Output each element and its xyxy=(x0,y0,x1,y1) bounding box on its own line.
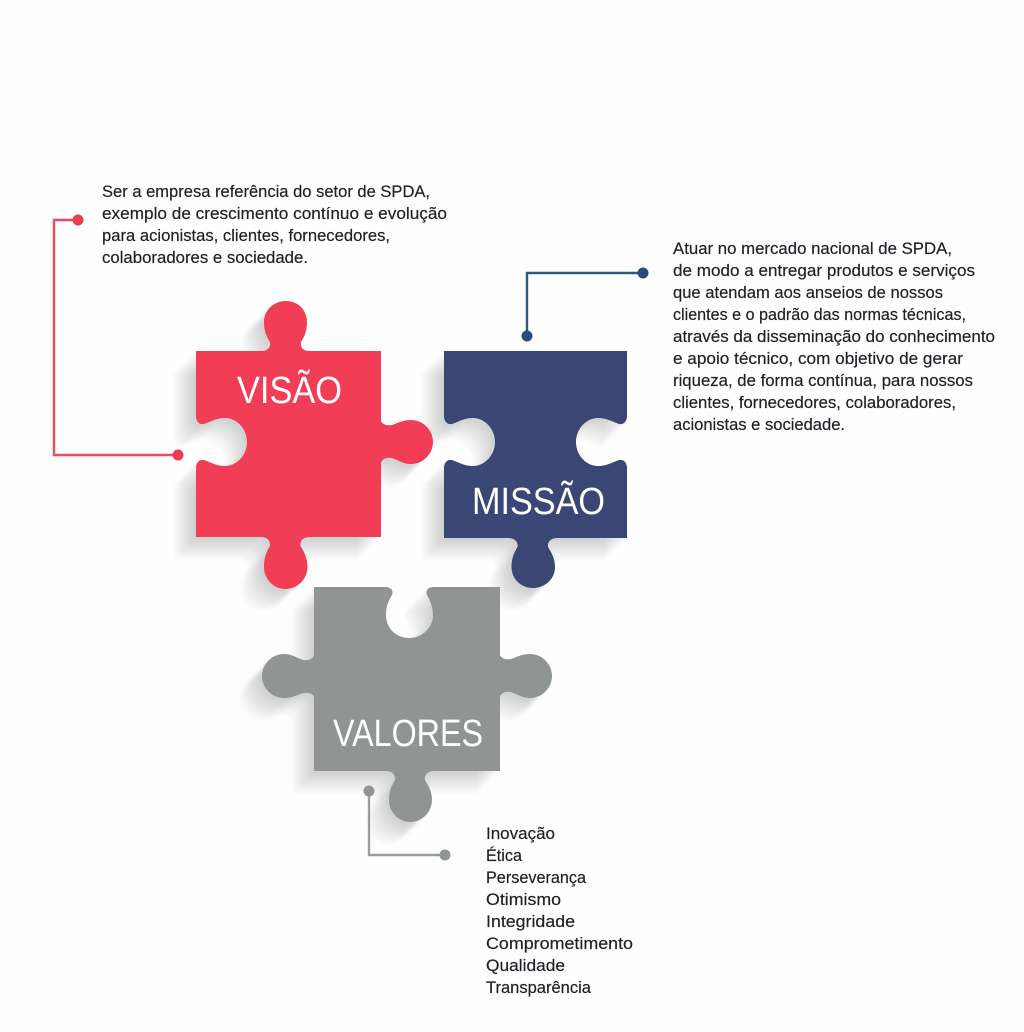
text: Missão description: e apoio técnico, com objetivo de gerar xyxy=(673,349,963,368)
text: Missão description: clientes, fornecedores, colaboradores, xyxy=(673,393,956,412)
text: Visão description: colaboradores e sociedade. xyxy=(102,248,308,267)
text: Valores list: Qualidade xyxy=(486,956,565,975)
text: Missão description: Atuar no mercado nacional de SPDA, xyxy=(673,239,952,258)
text: Missão description xyxy=(673,239,995,434)
text: Valores list: Ética xyxy=(486,846,523,865)
puzzle piece: Visão xyxy=(196,301,433,589)
text: Valores list: Integridade xyxy=(486,912,575,931)
puzzle piece shadows xyxy=(174,303,625,844)
label: MISSÃO: MISSÃO xyxy=(472,480,605,523)
text: Valores list: Comprometimento xyxy=(486,934,633,953)
puzzle piece: Missão xyxy=(444,351,627,588)
connector: Visão xyxy=(54,214,184,460)
connector: Valores xyxy=(364,786,450,860)
text: Valores list: Otimismo xyxy=(486,890,561,909)
text: Valores list xyxy=(486,824,633,997)
text: Missão description: de modo a entregar produtos e serviços xyxy=(673,261,975,280)
label: VALORES: VALORES xyxy=(333,713,483,755)
text: Missão description: acionistas e sociedade. xyxy=(673,415,845,434)
text: Visão description xyxy=(102,182,447,267)
text: Missão description: através da disseminação do conhecimento xyxy=(673,327,995,346)
puzzle piece: Valores xyxy=(262,587,552,822)
text: Valores list: Inovação xyxy=(486,824,555,843)
label: VISÃO: VISÃO xyxy=(237,369,342,412)
text: Visão description: para acionistas, clientes, fornecedores, xyxy=(102,226,390,245)
text: Missão description: clientes e o padrão das normas técnicas, xyxy=(673,305,966,324)
text: Missão description: riqueza, de forma contínua, para nossos xyxy=(673,371,973,390)
connector: Missão xyxy=(522,268,648,342)
text: Valores list: Transparência xyxy=(486,978,592,997)
text: Visão description: exemplo de crescimento contínuo e evolução xyxy=(102,204,447,223)
text: Missão description: que atendam aos anseios de nossos xyxy=(673,283,943,302)
text: Valores list: Perseverança xyxy=(486,868,587,887)
text: Visão description: Ser a empresa referência do setor de SPDA, xyxy=(102,182,430,201)
